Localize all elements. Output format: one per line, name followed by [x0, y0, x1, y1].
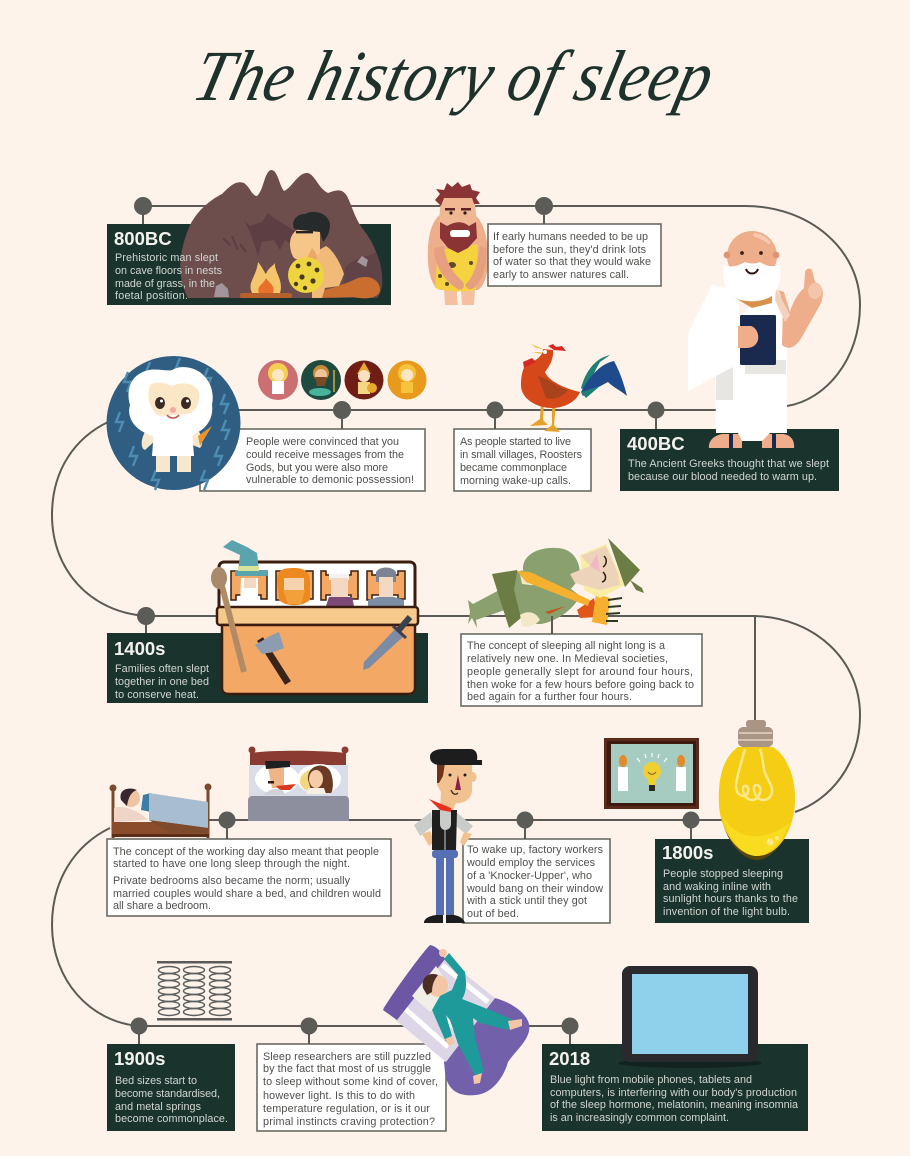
text: 800BC description: made of grass, in the: [115, 278, 215, 290]
panel: working day text: The concept of the working day also meant that people: [113, 846, 379, 858]
panel: roosters text: morning wake-up calls.: [460, 475, 571, 487]
panel: Gods text: Gods, but you were also more: [246, 462, 388, 474]
icon: Zeus in circle: [106, 356, 240, 490]
panel: sleep researchers text: Sleep researchers are still puzzled: [263, 1051, 431, 1063]
heading: 800BC: 800BC: [114, 228, 172, 249]
panel: early humans text: before the sun, they'd drink lots: [493, 244, 647, 256]
panel: roosters text: [454, 429, 591, 491]
panel: sleep researchers text: temperature regulation, or is it our: [263, 1103, 430, 1115]
panel: 2018 box: 2018: [549, 1048, 590, 1069]
text: 800BC description: Prehistoric man slept: [115, 252, 218, 264]
panel: all-night sleep text: [461, 634, 702, 706]
panel: 1800s box: People stopped sleeping: [663, 868, 783, 880]
panel: 1400s box: [107, 633, 428, 703]
panel: sleep researchers text: however light. Is this to do with: [263, 1090, 415, 1102]
panel: all-night sleep text: The concept of sleeping all night long is a: [467, 640, 665, 652]
panel: 800BC box: [107, 170, 391, 305]
panel: 1900s box: become standardised,: [115, 1088, 220, 1100]
icon: four gods: [258, 360, 426, 400]
icon: early human: [428, 182, 488, 305]
panel: 1800s box: and waking inline with: [663, 881, 771, 893]
panel: working day text: Private bedrooms also became the norm; usually: [113, 875, 351, 887]
panel: 1400s box: 1400s: [114, 638, 165, 659]
panel: 1400s box: together in one bed: [115, 676, 209, 688]
panel: 1900s box: become commonplace.: [115, 1113, 228, 1125]
panel: knocker-upper text: of a 'Knocker-Upper', who: [467, 870, 592, 882]
panel: 1800s box: 1800s: [662, 842, 713, 863]
panel: roosters text: became commonplace: [460, 462, 567, 474]
icon: rooster: [521, 344, 627, 432]
panel: sleep researchers text: to sleep without some kind of cover,: [263, 1076, 438, 1088]
panel: Gods text: vulnerable to demonic possession!: [246, 474, 414, 486]
panel: 2018 box: is an increasingly common complaint.: [550, 1112, 729, 1124]
panel: early humans text: of water so that they would wake: [493, 256, 651, 268]
panel: working day text: all share a bedroom.: [113, 900, 211, 912]
timeline path: [52, 206, 860, 1026]
icon: couple in bed: [248, 746, 349, 821]
icon: sleeping archer: [468, 538, 644, 628]
panel: working day text: married couples would share a bed, and children would: [113, 888, 381, 900]
panel: 1900s box: Bed sizes start to: [115, 1075, 197, 1087]
panel: 400BC box: 400BC: [627, 433, 685, 454]
icon: tablet: [618, 966, 762, 1068]
panel: 1900s box: 1900s: [114, 1048, 165, 1069]
panel: Gods text: could receive messages from the: [246, 449, 404, 461]
panel: 400BC box: [620, 429, 839, 491]
panel: all-night sleep text: relatively new one. In Medieval societies,: [467, 653, 668, 665]
panel: 2018 box: Blue light from mobile phones, tablets and: [550, 1074, 752, 1086]
icon: family bed: [211, 540, 418, 694]
panel: 400BC box: because our blood needed to warm up.: [628, 471, 817, 483]
panel: all-night sleep text: bed again for a further four hours.: [467, 691, 632, 703]
panel: knocker-upper text: [463, 839, 610, 923]
panel: sleep researchers text: [257, 1044, 446, 1131]
panel: all-night sleep text: people generally slept for around four hours,: [467, 666, 693, 678]
panel: knocker-upper text: out of bed.: [467, 908, 519, 920]
panel: 1800s box: [655, 720, 809, 923]
panel: working day text: [107, 839, 391, 916]
panel: Gods text: People were convinced that you: [246, 436, 399, 448]
panel: Gods text: [200, 429, 425, 491]
panel: roosters text: As people started to live: [460, 436, 571, 448]
panel: 2018 box: of the sleep hormone, melatonin, meaning insomnia: [550, 1099, 798, 1111]
panel: working day text: started to have one long sleep through the night.: [113, 858, 350, 870]
panel: 400BC box: The Ancient Greeks thought that we slept: [628, 458, 829, 470]
icon: sleeper on mattress: [383, 945, 529, 1095]
panel: all-night sleep text: then woke for a few hours before going back to: [467, 679, 694, 691]
panel: knocker-upper text: would bang on their window: [466, 883, 603, 895]
panel: 1900s box: and metal springs: [115, 1101, 202, 1113]
icon: cave with caveman and fire: [180, 170, 382, 298]
panel: 1400s box: to conserve heat.: [115, 689, 199, 701]
panel: 2018 box: computers, is interfering with our body's production: [550, 1087, 797, 1099]
title: The history of sleep: [186, 36, 722, 116]
text: 800BC description: foetal position.: [115, 290, 188, 302]
panel: 1800s box: sunlight hours thanks to the: [663, 893, 798, 905]
panel: knocker-upper text: would employ the services: [466, 857, 596, 869]
panel: knocker-upper text: To wake up, factory workers: [467, 844, 604, 856]
panel: early humans text: [488, 224, 661, 286]
panel: 1400s box: Families often slept: [115, 663, 209, 675]
panel: sleep researchers text: primal instincts craving protection?: [263, 1116, 435, 1128]
panel: sleep researchers text: by the fact that most of us struggle: [263, 1063, 431, 1075]
icon: Greek philosopher: [688, 231, 823, 448]
panel: roosters text: in small villages, Roosters: [460, 449, 583, 461]
panel: 1900s box: [107, 1044, 235, 1131]
icon: light bulb: [719, 720, 795, 860]
text: 800BC description: [115, 252, 223, 302]
panel: early humans text: early to answer natures call.: [493, 269, 629, 281]
panel: early humans text: If early humans needed to be up: [493, 231, 648, 243]
icon: knocker-upper man: [414, 749, 482, 923]
panel: 1800s box: invention of the light bulb.: [663, 906, 790, 918]
panel: knocker-upper text: with a stick until they got: [466, 895, 587, 907]
icon: picture frame with bulb and candles: [604, 738, 699, 809]
text: 800BC description: on cave floors in nests: [115, 265, 223, 277]
icon: child's bed: [110, 784, 212, 838]
timeline nodes: [130, 197, 700, 1044]
panel: 2018 box: [542, 966, 808, 1131]
icon: metal springs: [157, 961, 232, 1020]
